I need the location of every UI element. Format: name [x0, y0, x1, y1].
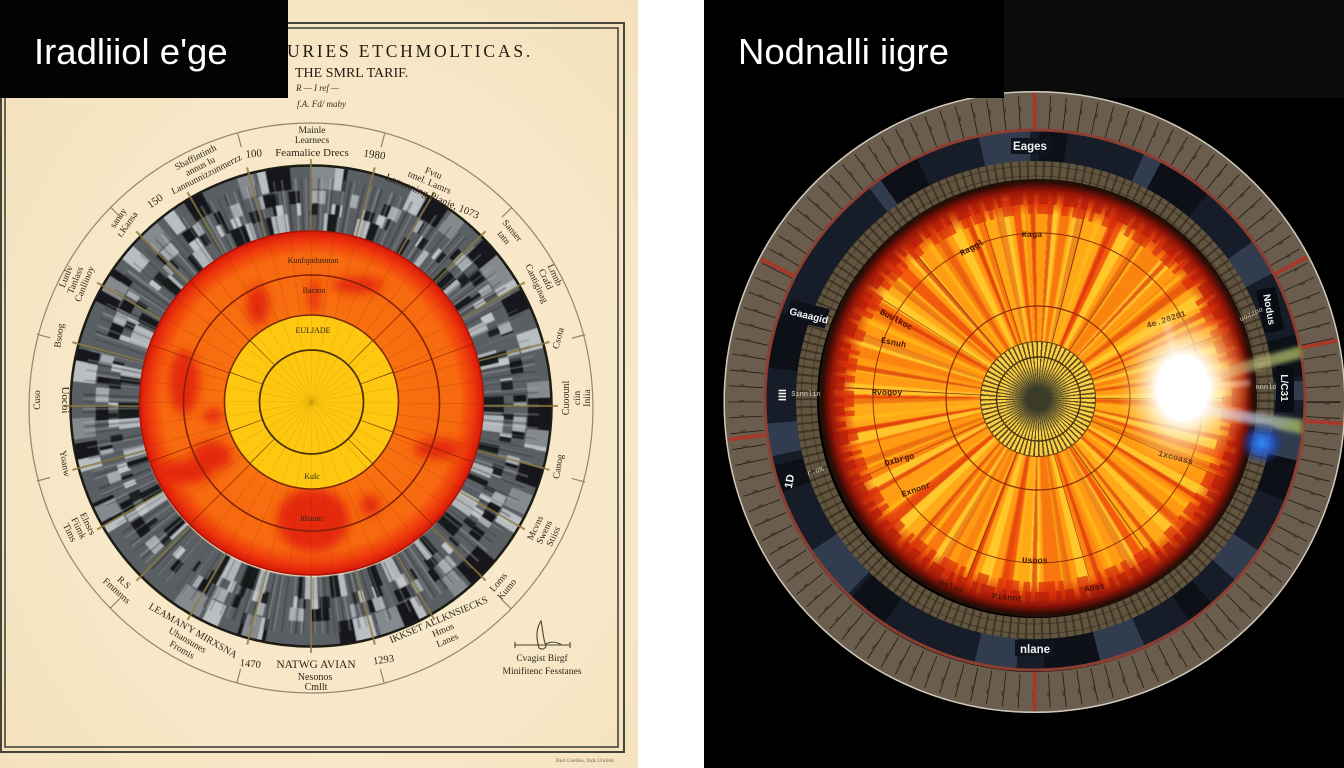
dark data labels on fire: Esnuh: [880, 336, 907, 351]
dark data labels on fire: Rvogoy: [872, 388, 902, 398]
outer ring labels: Csota: [551, 326, 567, 350]
outer ring labels: Tanlass: [66, 265, 86, 296]
disc sector labels: Kunfspidusman: [288, 256, 338, 265]
dark data labels on fire: Pisnnt: [991, 591, 1023, 605]
outer ring labels: Canog: [552, 453, 566, 480]
dark data labels on fire: 1xcoass: [1157, 449, 1194, 467]
jagged edge: [846, 206, 1230, 590]
dark data labels on fire: Kaga: [1022, 230, 1042, 240]
panel: traditional chart on parchment: [0, 0, 638, 768]
outer ring labels: Cuoounl: [561, 381, 572, 415]
dark data labels on fire: Aoas: [1084, 581, 1106, 595]
white ring labels: Eages: [1013, 141, 1047, 153]
yellow core: [224, 315, 398, 489]
heading text block: URIES ETCHMOLTICAS.: [287, 41, 533, 61]
outer ring labels: Nesonos: [298, 672, 332, 683]
heading: right title: Nodnalli iigre: [738, 31, 949, 72]
heading: left title: Iradliiol e'ge: [34, 31, 228, 72]
outer ring labels: Fiimk: [68, 516, 87, 541]
outer ring labels: Fmmnns: [100, 577, 132, 607]
grey data ring: [70, 166, 552, 646]
panel: title box traditional: [0, 0, 288, 98]
disc sector labels: Ithaouc: [300, 514, 324, 523]
white ring labels: L/C31: [1278, 374, 1289, 402]
inner band: [129, 224, 493, 588]
outer ring labels: annus lu: [184, 155, 217, 179]
small bead labels: [791, 306, 1277, 478]
top right dark block: [1004, 0, 1344, 98]
disc sector labels: [288, 256, 338, 523]
outer ring labels: Uhansunes: [166, 626, 208, 656]
white flare: [1115, 304, 1251, 472]
outer ring labels: ciin: [573, 391, 583, 405]
navy data ring: [765, 130, 1305, 670]
blue glow: [1240, 421, 1284, 465]
heading text block: [287, 41, 533, 109]
outer ring labels: Lanes: [435, 632, 460, 650]
red and orange disc: [140, 231, 484, 575]
outer ring labels: Lmnb: [545, 263, 563, 288]
white ring labels: nlane: [1020, 644, 1050, 656]
outer ring labels: Yoanw: [57, 450, 71, 478]
outer ring labels: Kumo: [496, 577, 519, 602]
dark spokes: [902, 262, 1174, 534]
beam: upper green: [1205, 346, 1302, 384]
radial fire disc: [820, 180, 1256, 616]
dark data labels on fire: Raggl: [958, 238, 986, 259]
panel: modern chart on black: [704, 0, 1344, 768]
page frame: [1, 23, 624, 752]
outer ring labels: 1470: [239, 658, 261, 671]
outer scale rings: [723, 91, 1344, 713]
outer ring labels: Mcvns: [526, 514, 546, 542]
outer ring labels: Mainle: [299, 126, 325, 136]
outer ring labels: Tims: [60, 522, 78, 544]
emblem caption: [503, 653, 582, 677]
dark data labels on fire: Buulkoc: [878, 307, 914, 333]
outer scale circle with ticks: [29, 123, 593, 693]
heading text block: f.A. Fd/ maby: [297, 99, 346, 109]
outer ring labels: [33, 126, 593, 693]
outer ring labels: Uocoi: [59, 387, 71, 413]
heading text block: R — I ref —: [295, 83, 340, 93]
outer ring labels: Elnsrs: [77, 511, 97, 537]
outer ring labels: Cantiginag: [522, 263, 549, 305]
outer ring labels: Sanser: [500, 218, 524, 245]
small bead labels: Sinnlin: [791, 391, 821, 399]
outer ring labels: tmel. Lamrs: [406, 170, 453, 197]
outer ring labels: Feamalice Drecs: [275, 147, 349, 159]
outer ring labels: 150: [145, 192, 166, 211]
footer credit: Bnd Gneifes, Inds Unifeib: [556, 757, 614, 764]
outer ring labels: 100: [245, 147, 263, 161]
icon: quill emblem: [515, 621, 570, 649]
outer ring labels: Canllinoy: [74, 265, 97, 304]
small bead labels: uozzoo: [1238, 306, 1265, 324]
streaks: [111, 206, 511, 606]
outer ring labels: t.Kansa: [116, 210, 141, 240]
outer ring labels: NATWG AVIAN: [276, 659, 356, 671]
outer ring labels: tatn: [495, 230, 512, 247]
outer ring labels: Lannunnizzunmerzz: [170, 153, 244, 197]
outer ring labels: IKKSET ALLKNSIECKS: [388, 595, 490, 646]
outer ring labels: Learnecs: [295, 136, 329, 146]
beam: lower violet-green: [1200, 404, 1302, 434]
white ring labels: 1D: [783, 473, 797, 489]
dark data labels on fire: Dxbrgo: [883, 451, 916, 469]
heading text block: THE SMRL TARIF.: [295, 66, 408, 81]
dark data labels on fire: Usoos: [1022, 556, 1048, 566]
yellow sunburst core: [980, 341, 1096, 457]
outer ring labels: sanay: [109, 207, 130, 230]
outer ring labels: Swens: [535, 519, 555, 546]
disc sector labels: Kulc: [304, 472, 320, 481]
dark data labels on fire: 4e.20201: [1145, 309, 1187, 331]
outer ring labels: Loms: [488, 571, 510, 594]
outer ring labels: Hmos: [431, 622, 456, 640]
panel: title box modern: [704, 0, 1004, 98]
fire disc overlay: spokes, rings, edge: [819, 179, 1257, 617]
outer ring labels: Fromis: [167, 639, 196, 662]
disc sector labels: EULJADE: [295, 326, 331, 335]
beaded ring: [801, 166, 1269, 634]
white ring labels: [777, 138, 1294, 656]
outer ring labels: Lanunning Pianie, 1073: [384, 172, 481, 222]
outer ring labels: Cuso: [33, 390, 43, 410]
outer ring labels: Fvtu: [423, 166, 443, 182]
outer ring labels: Sbaffintinth: [173, 142, 219, 173]
dark data labels on fire: Exnonr: [900, 480, 932, 500]
white ring labels: IIII: [777, 389, 789, 401]
heavy red-disc spokes: [200, 292, 422, 514]
middle bands: [102, 197, 520, 615]
white ring labels: Nodus: [1260, 293, 1277, 326]
outer ring labels: Iniia: [583, 389, 593, 407]
outer ring labels: 1980: [363, 148, 387, 163]
dark data labels on fire: [872, 230, 1194, 605]
outer ring labels: 1293: [372, 654, 395, 667]
outer block band: [82, 177, 540, 635]
overlay: flare, beams and labels: [777, 138, 1305, 656]
small bead labels: r.o%: [806, 465, 826, 478]
red scale markers: [728, 93, 1343, 711]
heat patches: [160, 277, 462, 552]
outer ring labels: R.S: [115, 575, 132, 592]
white ring labels: Gaaagid: [788, 306, 829, 327]
thin red-disc spokes: [182, 274, 440, 532]
outer ring labels: Bsoog: [53, 323, 67, 348]
dark data labels on fire: Nnlss: [937, 578, 964, 596]
outer ring labels: Lunlv: [58, 264, 76, 289]
outer ring labels: LEAMAN'Y MIRXSNA: [147, 601, 239, 661]
disc sector labels: Bacmn: [303, 286, 325, 295]
emblem caption: Cvagist Birgf: [516, 653, 568, 664]
small bead labels: nnnlo: [1255, 384, 1277, 392]
outer ring labels: Cmllt: [305, 682, 328, 693]
outer ring labels: Crafd: [536, 267, 555, 292]
outer ring labels: Stiiss: [545, 525, 563, 548]
emblem caption: Minifitenc Fesstanes: [503, 666, 582, 677]
